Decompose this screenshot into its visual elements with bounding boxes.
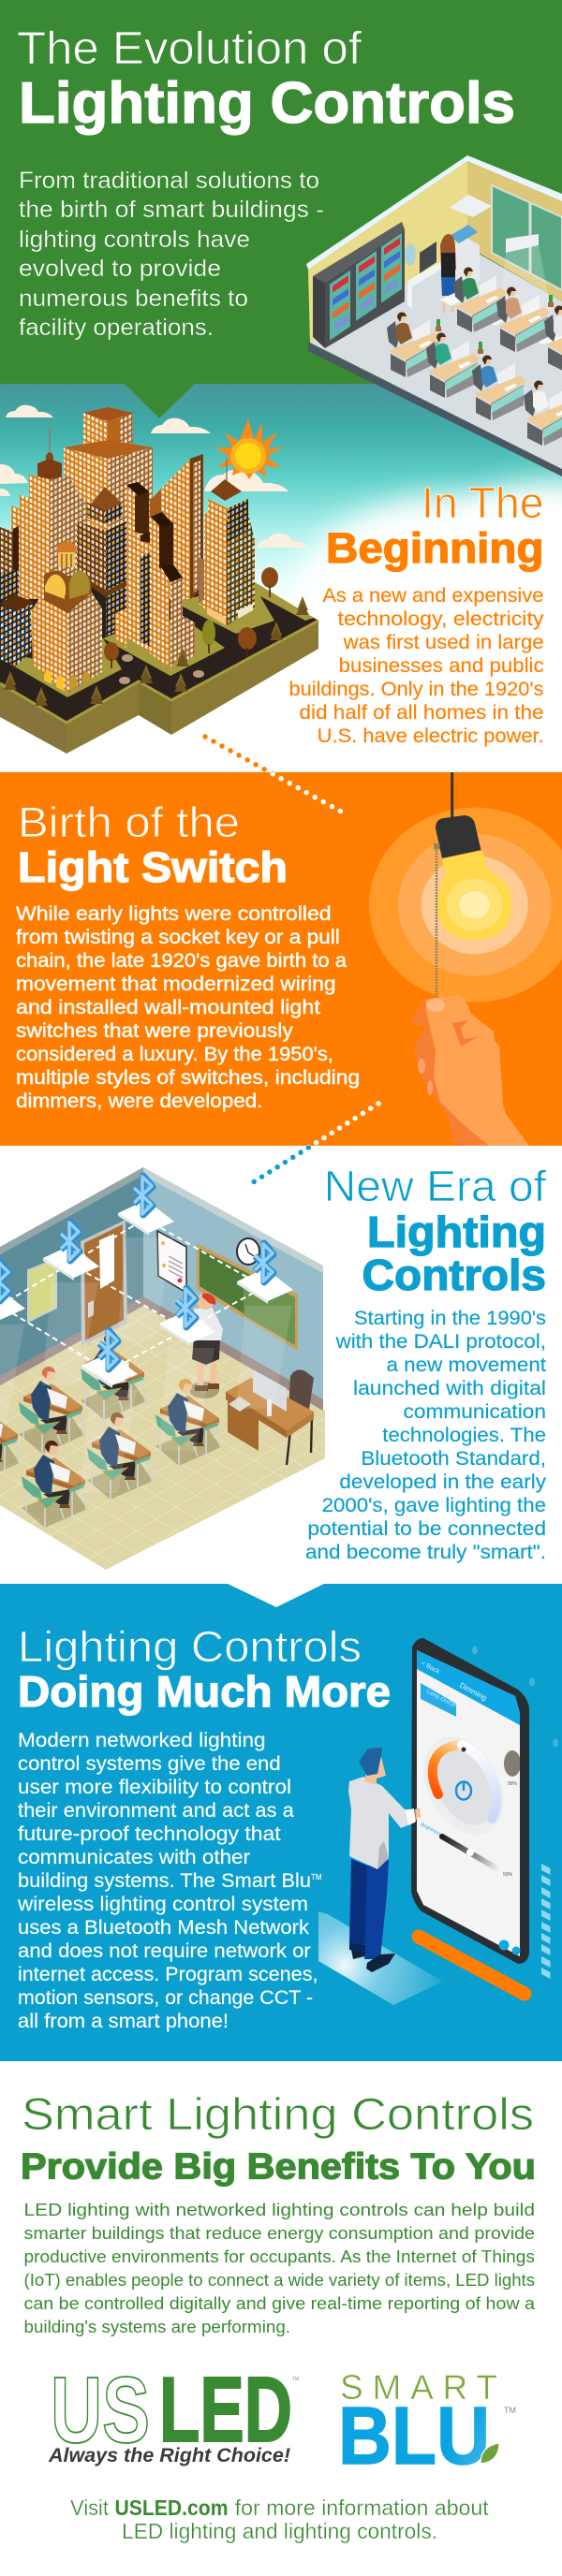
title: Lighting Controls — [19, 71, 515, 136]
text: doing much more: uses a Bluetooth Mesh Network — [18, 1917, 310, 1939]
footer call to action — [70, 2496, 489, 2543]
left dark buildings — [0, 526, 35, 666]
text: new era of lighting controls: a new movement — [386, 1354, 546, 1376]
logo: Smart Blu: TM — [504, 2406, 516, 2415]
title — [17, 23, 515, 136]
intro text: numerous benefits to — [19, 285, 248, 312]
heading: doing much more: Doing Much More — [18, 1667, 391, 1716]
text: new era of lighting controls: 2000's, gave lighting the — [322, 1495, 546, 1516]
text: birth of the light switch — [16, 903, 360, 1112]
text: in the beginning — [288, 585, 544, 747]
heading: doing much more — [18, 1622, 391, 1716]
clock tower — [31, 541, 102, 693]
text: smart lighting benefits: building's systems are performing. — [24, 2318, 290, 2336]
back tower — [83, 407, 133, 459]
illustration: isometric city — [0, 407, 318, 754]
text: new era of lighting controls: developed in the early — [339, 1471, 547, 1493]
footer call to action: Visit — [70, 2496, 110, 2520]
illustration: man at phone — [318, 1748, 443, 2005]
heading: new era of lighting controls: New Era of — [324, 1162, 546, 1210]
text: birth of the light switch: multiple styles of switches, including — [16, 1067, 360, 1089]
panel: lighting controls doing much more — [0, 1584, 562, 2061]
text: smart lighting benefits: (IoT) enables people to connect a wide variety of items, LED lights — [24, 2271, 535, 2290]
illustration: phone: Brightness — [420, 1822, 442, 1837]
logo: USLED: LED — [159, 2358, 292, 2461]
logo: USLED — [48, 2358, 299, 2466]
title: The Evolution of — [17, 23, 362, 74]
poster — [157, 1231, 186, 1293]
text: new era of lighting controls: technologies. The — [382, 1425, 546, 1446]
heading: in the beginning: Beginning — [326, 524, 543, 572]
wall notice — [28, 1259, 56, 1322]
text: doing much more: user more flexibility to control — [18, 1777, 291, 1798]
logo: USLED: TM — [292, 2377, 299, 2382]
text: in the beginning: businesses and public — [339, 655, 544, 677]
orange floor bar — [419, 1937, 525, 1994]
text: doing much more: motion sensors, or change CCT - — [18, 1987, 313, 2009]
text: doing much more: internet access. Program scenes, — [18, 1964, 318, 1985]
text: in the beginning: As a new and expensive — [322, 585, 543, 607]
pull chain — [434, 843, 440, 997]
text: doing much more: their environment and act as a — [18, 1800, 294, 1822]
heading: new era of lighting controls: Controls — [362, 1251, 546, 1299]
text: in the beginning: U.S. have electric power. — [318, 725, 544, 747]
footer call to action: for more information about — [235, 2496, 489, 2520]
intro text — [19, 168, 324, 341]
footer call to action: USLED.com — [114, 2496, 229, 2520]
text: doing much more: all from a smart phone! — [18, 2011, 229, 2032]
dotted connector: white to blue — [247, 1104, 378, 1186]
text: birth of the light switch: switches that were previously — [16, 1020, 293, 1042]
office equipment and standing woman — [405, 195, 553, 328]
text: new era of lighting controls: Bluetooth Standard, — [361, 1448, 546, 1470]
text: smart lighting benefits: productive environments for occupants. As the Internet of Things — [24, 2247, 535, 2266]
door — [81, 1220, 127, 1346]
text: doing much more: control systems give the end — [18, 1753, 281, 1775]
illustration: light bulb glow — [369, 772, 562, 1146]
sky background — [0, 384, 562, 608]
icon: bulb — [436, 772, 511, 940]
dark centre tower — [77, 487, 126, 637]
dotted connector: orange to white — [205, 737, 341, 812]
footer call to action: LED lighting and lighting controls. — [122, 2519, 437, 2543]
white notch pointer — [228, 1584, 324, 1607]
text: new era of lighting controls: launched with digital — [353, 1378, 546, 1399]
heading: birth of the light switch — [18, 798, 288, 891]
heading: doing much more: Lighting Controls — [18, 1622, 362, 1671]
illustration: phone: Lamp On/Off — [425, 1689, 456, 1709]
teacher — [189, 1293, 223, 1398]
logo: USLED: Always the Right Choice! — [48, 2445, 290, 2466]
intro text: evolved to provide — [19, 256, 221, 282]
text: new era of lighting controls: with the DALI protocol, — [335, 1331, 546, 1353]
light panels and bluetooth icons — [0, 1176, 293, 1493]
text: doing much more: and does not require network or — [18, 1940, 311, 1962]
heading: new era of lighting controls: Lighting — [367, 1208, 546, 1256]
trees and cars — [4, 567, 309, 706]
intro text: From traditional solutions to — [19, 168, 319, 194]
text: birth of the light switch: and installed wall-mounted light — [16, 997, 320, 1018]
text: smart lighting benefits: smarter buildings that reduce energy consumption and provide — [24, 2224, 535, 2243]
panel: birth of the light switch — [0, 772, 562, 1146]
intro text: lighting controls have — [19, 227, 250, 253]
text: doing much more — [17, 1730, 322, 2032]
text: new era of lighting controls: Starting in the 1990's — [354, 1308, 546, 1329]
text: birth of the light switch: movement that modernized wiring — [16, 973, 336, 995]
illustration: phone: 50% — [503, 1872, 513, 1878]
text: new era of lighting controls — [305, 1308, 547, 1563]
text: in the beginning: buildings. Only in the 1920's — [288, 679, 543, 700]
illustration: phone: 90% — [508, 1781, 518, 1787]
dial — [407, 1723, 520, 1849]
heading: new era of lighting controls — [324, 1162, 546, 1299]
logo: Smart Blu: BLU — [338, 2391, 490, 2481]
left stepped tower — [11, 426, 87, 608]
teacher desk — [226, 1369, 314, 1465]
city platform — [0, 524, 318, 754]
floor light stripes — [541, 1864, 551, 1979]
illustration: isometric office — [306, 155, 562, 476]
clouds — [0, 405, 308, 548]
bookshelves — [313, 222, 405, 348]
slant tower — [150, 454, 203, 599]
text: new era of lighting controls: and become truly "smart". — [305, 1542, 546, 1563]
text: new era of lighting controls: potential to be connected — [307, 1518, 546, 1540]
text: doing much more: building systems. The Smart Blu — [18, 1870, 311, 1892]
text: doing much more: wireless lighting control system — [17, 1894, 308, 1915]
intro text: the birth of smart buildings - — [19, 197, 324, 223]
text: doing much more: future-proof technology that — [18, 1823, 281, 1845]
text: doing much more: TM — [311, 1873, 322, 1881]
classroom walls and floor — [0, 1167, 325, 1570]
text: in the beginning: did half of all homes in the — [300, 702, 543, 724]
heading: birth of the light switch: Light Switch — [18, 843, 288, 891]
slider — [442, 1837, 498, 1869]
illustration: phone: < Back — [420, 1661, 441, 1676]
chalkboard — [197, 1243, 298, 1351]
text: birth of the light switch: dimmers, were developed. — [16, 1090, 262, 1112]
text: smart lighting benefits: LED lighting with networked lighting controls can help build — [24, 2201, 535, 2219]
heading: smart lighting controls: Smart Lighting Controls — [22, 2090, 534, 2140]
text: doing much more: communicates with other — [18, 1847, 250, 1868]
logo: Smart Blu: SMART — [340, 2368, 497, 2407]
text: doing much more: Modern networked lighting — [18, 1730, 266, 1751]
icon: leaf — [481, 2443, 499, 2464]
text: birth of the light switch: considered a luxury. By the 1950's, — [16, 1044, 333, 1065]
heading: smart lighting controls: Provide Big Benefits To You — [21, 2147, 536, 2187]
office desks and workers — [387, 267, 562, 446]
tall slim towers — [115, 482, 195, 667]
text: new era of lighting controls: communication — [403, 1401, 546, 1423]
panel: intro header — [0, 0, 562, 384]
logo: USLED: US — [51, 2358, 150, 2463]
illustration: phone: Dimming — [458, 1681, 488, 1703]
illustration: classroom — [0, 1167, 325, 1570]
office walls and floor — [306, 155, 562, 476]
text: smart lighting benefits: can be controlled digitally and give real-time reporting of how a — [24, 2294, 536, 2313]
student desks — [0, 1333, 221, 1528]
icon: hand — [410, 995, 529, 1146]
text: in the beginning: technology, electricity — [337, 608, 544, 630]
text: smart lighting benefits — [24, 2201, 536, 2336]
heading: in the beginning: In The — [422, 478, 543, 527]
heading: in the beginning — [326, 478, 543, 572]
background dots — [472, 1646, 558, 1747]
illustration: phone — [407, 1638, 529, 1964]
icon: sun — [215, 418, 283, 479]
green notch pointer — [124, 383, 196, 418]
heading: birth of the light switch: Birth of the — [18, 798, 240, 846]
intro text: facility operations. — [19, 315, 214, 341]
right tower — [199, 459, 255, 625]
panel: in the beginning — [0, 383, 562, 772]
text: birth of the light switch: While early lights were controlled — [16, 903, 332, 925]
text: in the beginning: was first used in large — [343, 632, 544, 653]
text: birth of the light switch: chain, the late 1920's gave birth to a — [16, 950, 347, 972]
clock — [237, 1238, 259, 1265]
text: birth of the light switch: from twisting a socket key or a pull — [16, 927, 340, 948]
wireless network links — [0, 1219, 264, 1371]
heading: smart lighting controls — [21, 2090, 536, 2187]
mid building — [64, 440, 153, 534]
